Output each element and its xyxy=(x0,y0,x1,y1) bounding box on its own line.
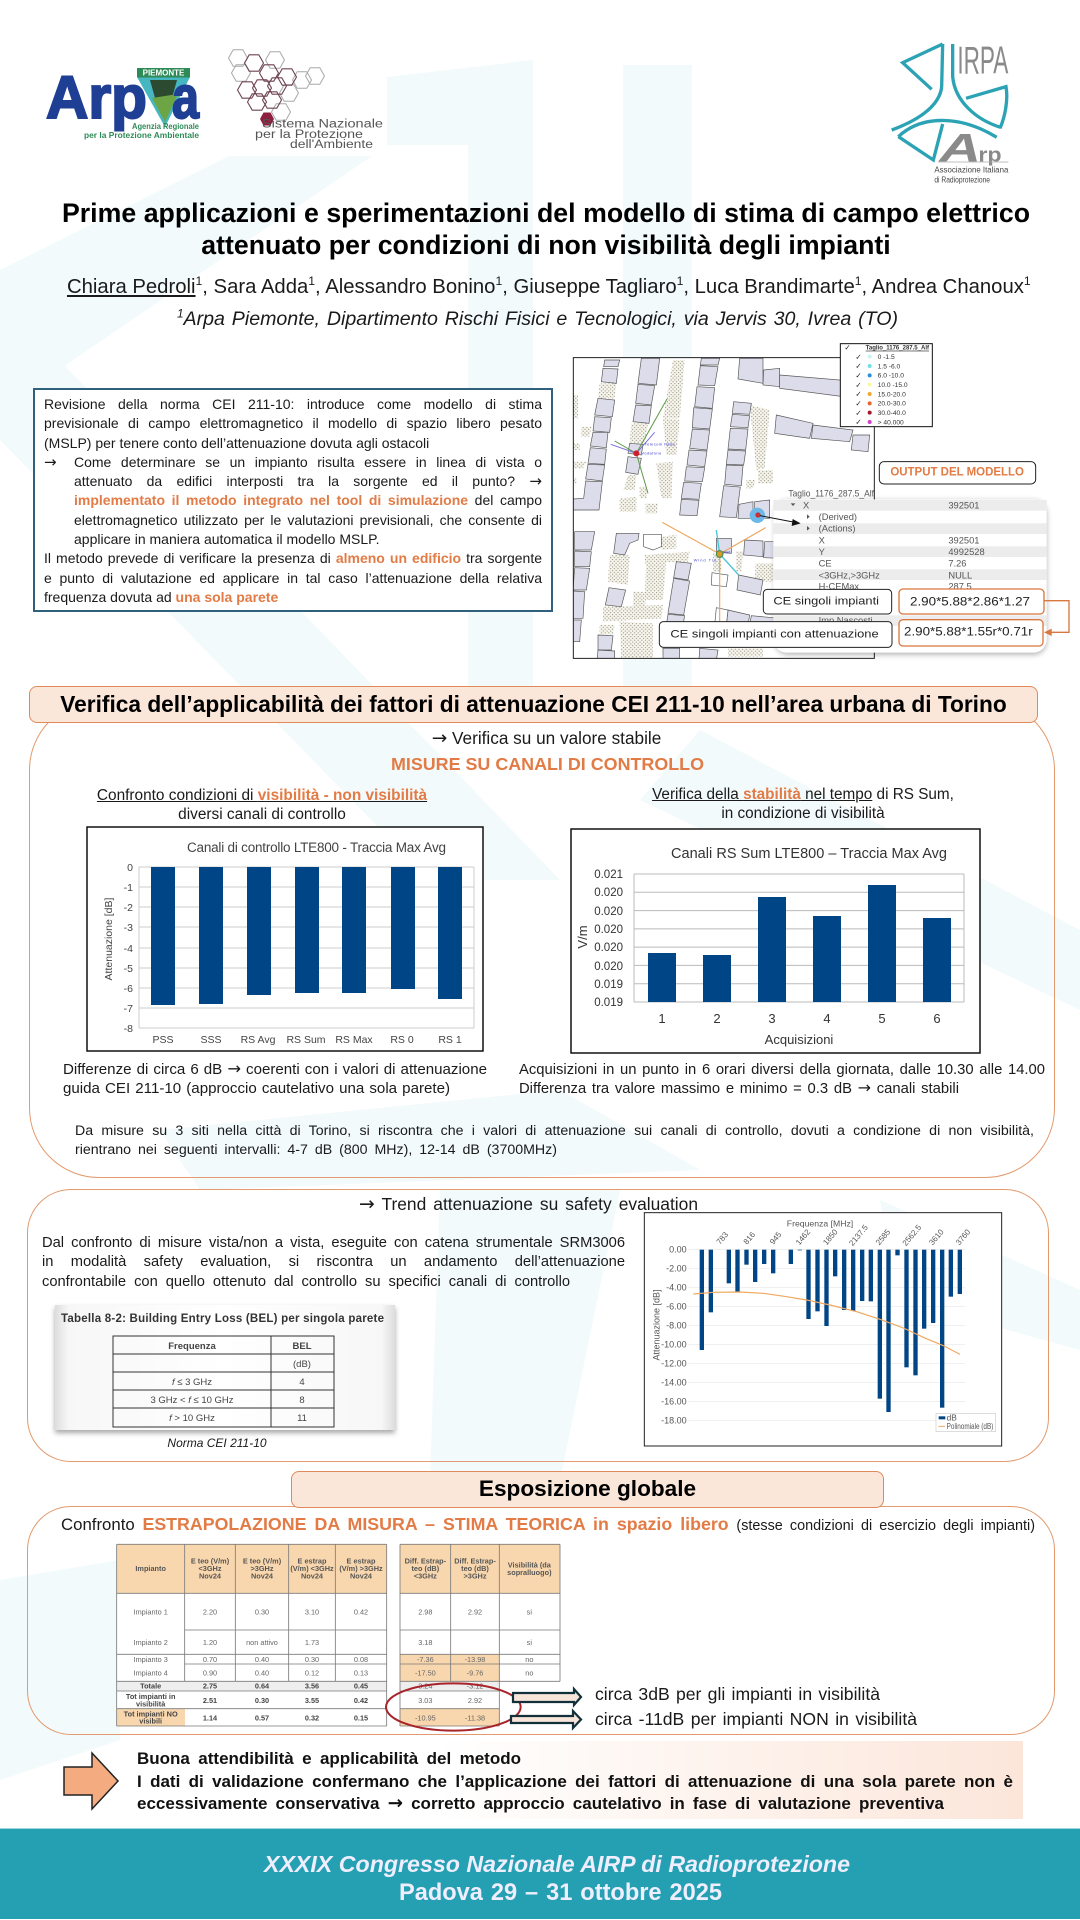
logo: Arpa Piemonte: a xyxy=(172,64,200,131)
table: estrapolazione vs stima: -7.36 xyxy=(417,1655,434,1664)
text: safety evaluation: Dal confronto di misure vista/non a vista, eseguite con catena strumentale SRM3006 xyxy=(42,1235,625,1251)
bar chart: RS Sum: 3 xyxy=(768,1011,776,1026)
table: estrapolazione vs stima: E teo (V/m) xyxy=(243,1556,282,1565)
logo: Arpa Piemonte: Agenzia Regionale xyxy=(132,121,199,131)
table: estrapolazione vs stima: Diff. Estrap- xyxy=(454,1556,496,1565)
table: estrapolazione vs stima: 0.32 xyxy=(305,1713,319,1722)
subheading: trend attenuazione: → Trend attenuazione su safety evaluation xyxy=(359,1194,698,1215)
table: estrapolazione vs stima: -17.50 xyxy=(415,1668,436,1677)
chart legend: Polinomiale (dB) xyxy=(947,1421,993,1431)
bar chart: canali di controllo: -3 xyxy=(124,922,133,934)
table: estrapolazione vs stima: 3.56 xyxy=(305,1682,319,1691)
text: safety evaluation: confrontabile con quello ottenuto dal controllo su specifici canali di controllo xyxy=(42,1274,570,1290)
panel: introduction text: previsionale di campo elettromagnetico il modello di spazio libero pesato xyxy=(44,415,542,431)
label: CE con attenuazione xyxy=(659,622,892,647)
bar chart: canali di controllo: -5 xyxy=(124,963,133,975)
arrow: non visibilita xyxy=(510,1708,582,1731)
table: estrapolazione vs stima: (V/m) <3GHz xyxy=(290,1564,334,1573)
text: safety evaluation xyxy=(42,1235,625,1290)
attribute panel: H-CEMax xyxy=(819,582,859,592)
map legend: ✓ xyxy=(844,343,850,352)
logo: IRPA / AIRP xyxy=(891,38,1009,184)
table: estrapolazione vs stima: Tot impianti NO xyxy=(124,1709,178,1718)
table: estrapolazione vs stima: 2.92 xyxy=(468,1607,482,1616)
table: estrapolazione vs stima: Nov24 xyxy=(350,1572,373,1581)
text: acquisizioni: Differenza tra valore massimo e minimo = 0.3 dB → canali stabili xyxy=(519,1078,959,1097)
table: estrapolazione vs stima: E teo (V/m) xyxy=(191,1556,230,1565)
bar chart: RS Sum: 1 xyxy=(658,1011,666,1026)
table: estrapolazione vs stima: teo (dB) xyxy=(411,1564,440,1573)
map legend: ✓ xyxy=(855,408,861,417)
table: building entry loss: 4 xyxy=(299,1377,305,1388)
text: verifica stabilita: in condizione di visibilità xyxy=(721,805,885,822)
logo: Arpa Piemonte: per la Protezione Ambientale xyxy=(84,130,199,140)
table: estrapolazione vs stima: 0.12 xyxy=(305,1668,319,1677)
bar chart: canali di controllo: SSS xyxy=(200,1034,222,1046)
table: estrapolazione vs stima: 0.13 xyxy=(354,1668,368,1677)
table: estrapolazione vs stima: 0.30 xyxy=(255,1607,269,1616)
bar chart: RS Sum: 0.020 xyxy=(594,961,623,973)
bar chart: attenuazione per frequenza: 945 xyxy=(768,1230,784,1246)
bar chart: attenuazione per frequenza: -10.00 xyxy=(661,1339,687,1349)
text: differenze 6 dB: Differenze di circa 6 dB → coerenti con i valori di attenuazione xyxy=(63,1059,487,1078)
table: estrapolazione vs stima: 2.75 xyxy=(203,1682,217,1691)
panel: conclusioni: I dati di validazione confermano che l’applicazione dei fattori di attenuazione di una sola parete non è xyxy=(137,1772,1013,1790)
panel: introduction text: elettromagnetico utilizzato per le valutazioni previsionali, che consente di xyxy=(74,512,542,528)
table: estrapolazione vs stima: 1.73 xyxy=(305,1638,319,1647)
bar chart: canali di controllo xyxy=(86,826,484,1052)
table: estrapolazione vs stima: 3.18 xyxy=(418,1638,432,1647)
table: estrapolazione vs stima: -13.98 xyxy=(465,1655,485,1664)
table: estrapolazione vs stima: visibilità xyxy=(136,1699,166,1708)
panel outline: verifica xyxy=(29,700,1055,1178)
bar chart: RS Sum: Canali RS Sum LTE800 – Traccia Max Avg xyxy=(671,846,947,862)
bar chart: RS Sum: 0.020 xyxy=(594,942,623,954)
table: estrapolazione vs stima: 0.45 xyxy=(354,1682,368,1691)
attribute panel: NULL xyxy=(948,570,972,580)
table: estrapolazione vs stima xyxy=(116,1544,560,1732)
bar chart: attenuazione per frequenza: 3610 xyxy=(927,1227,946,1247)
table: estrapolazione vs stima: 2.51 xyxy=(203,1696,217,1705)
table: estrapolazione vs stima: -10.95 xyxy=(415,1713,436,1722)
text: acquisizioni xyxy=(519,1062,1045,1097)
map legend: 10.0 -15.0 xyxy=(878,382,908,389)
table: estrapolazione vs stima: visibili xyxy=(139,1717,162,1726)
icon: orange arrow xyxy=(63,1751,119,1811)
map with model output: Wind Tre xyxy=(694,558,717,563)
text: risultati xyxy=(595,1684,918,1729)
value: CE singoli impianti xyxy=(899,589,1044,614)
output label xyxy=(879,462,1036,484)
attribute panel: (Derived) xyxy=(819,512,857,522)
logo: IRPA / AIRP: di Radioprotezione xyxy=(934,175,990,184)
bar chart: attenuazione per frequenza: Attenuazione [dB] xyxy=(651,1289,661,1361)
table: estrapolazione vs stima: Diff. Estrap- xyxy=(405,1556,447,1565)
bar chart: attenuazione per frequenza: 816 xyxy=(742,1230,757,1246)
table: estrapolazione vs stima: si xyxy=(527,1607,532,1616)
table: building entry loss: 11 xyxy=(297,1413,307,1424)
table: estrapolazione vs stima: 3.10 xyxy=(305,1607,319,1616)
bar chart: RS Sum: V/m xyxy=(575,925,590,949)
value: CE singoli impianti: 2.90*5.88*2.86*1.27 xyxy=(910,596,1030,609)
map legend: 6.0 -10.0 xyxy=(878,373,904,380)
attribute panel: <3GHz,>3GHz xyxy=(819,570,880,580)
table: estrapolazione vs stima: si xyxy=(527,1638,532,1647)
logo: Sistema Nazionale per la Protezione dell'Ambiente: Sistema Nazionale xyxy=(262,118,383,130)
logo: Sistema Nazionale per la Protezione dell'Ambiente: per la Protezione xyxy=(255,129,363,141)
attribute panel: 7.26 xyxy=(948,559,966,569)
bar chart: attenuazione per frequenza: Frequenza [MHz] xyxy=(787,1219,853,1229)
title xyxy=(62,198,1030,260)
heading: misure su canali di controllo: MISURE SU CANALI DI CONTROLLO xyxy=(391,754,704,774)
bar chart: canali di controllo: RS 0 xyxy=(390,1034,414,1046)
panel: introduction text: frequenza dovuta ad una sola parete xyxy=(44,589,278,605)
bar chart: canali di controllo: Attenuazione [dB] xyxy=(103,897,115,980)
table: estrapolazione vs stima: 0.40 xyxy=(255,1668,269,1677)
attribute panel: 287.5 xyxy=(948,582,972,592)
title: Prime applicazioni e sperimentazioni del modello di stima di campo elettrico xyxy=(62,198,1030,228)
table: estrapolazione vs stima: 3.03 xyxy=(418,1696,432,1705)
map legend: 0 -1.5 xyxy=(878,354,895,361)
bar chart: attenuazione per frequenza: -14.00 xyxy=(661,1377,687,1387)
bar chart: attenuazione per frequenza: 2585 xyxy=(874,1227,893,1247)
bar chart: attenuazione per frequenza: 2562.5 xyxy=(901,1223,924,1248)
text: risultati: circa 3dB per gli impianti in visibilità xyxy=(595,1684,880,1704)
table: building entry loss: 8 xyxy=(299,1395,305,1406)
table: building entry loss xyxy=(55,1305,395,1430)
map legend: ✓ xyxy=(855,362,861,371)
table: estrapolazione vs stima: <3GHz xyxy=(414,1572,437,1581)
bar chart: RS Sum: 0.019 xyxy=(594,997,623,1009)
bar chart: RS Sum: 0.020 xyxy=(594,906,623,918)
arrow: orange connector xyxy=(1044,601,1069,636)
panel: introduction text: (MSLP) per tenere conto dell’attenuazione dovuta agli ostacoli xyxy=(44,435,429,451)
bar chart: attenuazione per frequenza: -8.00 xyxy=(666,1320,687,1330)
table: estrapolazione vs stima: 0.90 xyxy=(203,1668,217,1677)
bar chart: attenuazione per frequenza: 2137.5 xyxy=(847,1223,870,1248)
table: estrapolazione vs stima: teo (dB) xyxy=(461,1564,489,1573)
attribute panel: Y xyxy=(819,547,826,557)
table: estrapolazione vs stima: sopralluogo) xyxy=(507,1568,552,1577)
map legend: Taglio_1176_287.5_Alf xyxy=(866,345,930,352)
table: estrapolazione vs stima: Nov24 xyxy=(251,1572,274,1581)
logo: IRPA / AIRP: Associazione Italiana xyxy=(934,166,1009,175)
panel outline: esposizione globale xyxy=(27,1506,1055,1735)
table: estrapolazione vs stima: non attivo xyxy=(246,1638,278,1647)
bar chart: RS Sum: Acquisizioni xyxy=(765,1032,833,1047)
table: building entry loss: Frequenza xyxy=(168,1341,216,1352)
table: estrapolazione vs stima: 1.20 xyxy=(203,1638,217,1647)
attribute panel xyxy=(773,489,1047,655)
panel: introduction text xyxy=(33,388,553,612)
panel: introduction text: Il metodo prevede di verificare la presenza di almeno un edificio tra sorgente xyxy=(44,550,542,566)
map legend: ✓ xyxy=(855,399,861,408)
chart legend: dB xyxy=(947,1412,957,1422)
logo: Arpa Piemonte: PIEMONTE xyxy=(143,68,185,78)
table: estrapolazione vs stima: 0.42 xyxy=(354,1607,368,1616)
bar chart: attenuazione per frequenza xyxy=(644,1212,1002,1446)
heading: verifica: Verifica dell’applicabilità dei fattori di attenuazione CEI 211-10 nell’area urbana di Torino xyxy=(60,691,1007,717)
bar chart: canali di controllo: Canali di controllo LTE800 - Traccia Max Avg xyxy=(187,840,446,855)
table: building entry loss: 3 GHz < f ≤ 10 GHz xyxy=(150,1395,234,1406)
table: estrapolazione vs stima: 0.08 xyxy=(354,1655,368,1664)
panel: conclusioni: Buona attendibilità e applicabilità del metodo xyxy=(137,1749,521,1768)
map legend: ✓ xyxy=(855,418,861,427)
bar chart: RS Sum: 0.020 xyxy=(594,887,623,899)
footer xyxy=(0,1828,1080,1919)
bar chart: attenuazione per frequenza: 1850 xyxy=(821,1227,840,1247)
table: estrapolazione vs stima: -9.76 xyxy=(467,1668,483,1677)
table: estrapolazione vs stima: Visibilità (da xyxy=(508,1560,552,1569)
logo: Sistema Nazionale per la Protezione dell'Ambiente: dell'Ambiente xyxy=(290,139,373,151)
chart legend xyxy=(936,1412,996,1432)
map legend: 30.0-40.0 xyxy=(878,410,906,417)
title: attenuato per condizioni di non visibilità degli impianti xyxy=(201,230,891,260)
logo: Sistema Nazionale per la Protezione dell'Ambiente xyxy=(228,49,387,156)
logo: Arpa Piemonte: Arp xyxy=(46,64,147,131)
attribute panel: X xyxy=(819,535,826,545)
text: confronto visibilita: Confronto condizioni di visibilità - non visibilità xyxy=(97,787,427,804)
map legend: 1.5 -6.0 xyxy=(878,363,901,370)
table: building entry loss: f ≤ 3 GHz xyxy=(172,1377,212,1388)
output label: OUTPUT DEL MODELLO xyxy=(890,466,1024,479)
panel: introduction text: applicare in maniera automatica il modello MSLP. xyxy=(74,531,380,547)
map legend: ✓ xyxy=(855,380,861,389)
logo: Arpa Piemonte xyxy=(46,64,200,140)
text: safety evaluation: in modalità safety evaluation, si riscontra un andamento dell’attenuazione xyxy=(42,1254,625,1270)
heading: verifica xyxy=(29,686,1038,723)
authors: Chiara Pedroli1, Sara Adda1, Alessandro Bonino1, Giuseppe Tagliaro1, Luca Brandimarte1, Andrea Chanoux1 xyxy=(67,274,1031,298)
bar chart: canali di controllo: -8 xyxy=(124,1023,133,1035)
footer: XXXIX Congresso Nazionale AIRP di Radioprotezione xyxy=(264,1851,850,1877)
table: estrapolazione vs stima: 0.64 xyxy=(255,1682,270,1691)
table: estrapolazione vs stima: no xyxy=(525,1655,533,1664)
text: confronto visibilita xyxy=(96,787,428,823)
footer: Padova 29 – 31 ottobre 2025 xyxy=(399,1880,722,1906)
text: confronto visibilita: diversi canali di controllo xyxy=(178,806,346,823)
panel: conclusioni: eccessivamente conservativa → corretto approccio cautelativo in fase di valutazione preventiva xyxy=(137,1793,944,1814)
attribute panel: X xyxy=(803,500,810,510)
bar chart: attenuazione per frequenza: 0.00 xyxy=(669,1245,687,1255)
logo: IRPA / AIRP: IRPA xyxy=(957,38,1009,82)
bar chart: RS Sum: 0.020 xyxy=(594,924,623,936)
label: CE singoli impianti: CE singoli impianti xyxy=(773,596,879,608)
bar chart: attenuazione per frequenza: 783 xyxy=(715,1230,730,1246)
attribute panel: CE xyxy=(819,559,832,569)
caption: norma CEI: Norma CEI 211-10 xyxy=(167,1436,267,1450)
attribute panel: 392501 xyxy=(948,535,979,545)
map legend: ✓ xyxy=(855,390,861,399)
table: estrapolazione vs stima: Nov24 xyxy=(301,1572,324,1581)
table: estrapolazione vs stima: E estrap xyxy=(298,1556,327,1565)
table: estrapolazione vs stima: Impianto 4 xyxy=(134,1668,168,1677)
table: estrapolazione vs stima: 0.15 xyxy=(354,1713,368,1722)
text: differenze 6 dB: guida CEI 211-10 (approccio cautelativo una sola parete) xyxy=(63,1080,450,1097)
panel: introduction text: Come determinare se un impianto risulta essere in linea di vista o xyxy=(74,454,542,470)
text: verifica stabilita xyxy=(652,786,954,822)
bar chart: attenuazione per frequenza: -12.00 xyxy=(661,1358,687,1368)
table: building entry loss: Tabella 8-2: Building Entry Loss (BEL) per singola parete xyxy=(61,1313,384,1325)
bar chart: canali di controllo: RS Avg xyxy=(241,1034,276,1046)
table: estrapolazione vs stima: 2.98 xyxy=(418,1607,432,1616)
table: estrapolazione vs stima: >3GHz xyxy=(250,1564,274,1573)
table: estrapolazione vs stima: <3GHz xyxy=(198,1564,222,1573)
table: estrapolazione vs stima: Totale xyxy=(140,1682,161,1691)
bar chart: RS Sum: 0.019 xyxy=(594,979,623,991)
table: estrapolazione vs stima: Nov24 xyxy=(199,1572,222,1581)
bar chart: canali di controllo: -1 xyxy=(124,882,133,894)
table: estrapolazione vs stima: 2.92 xyxy=(468,1696,482,1705)
heading: esposizione globale: Esposizione globale xyxy=(479,1476,696,1501)
table: building entry loss: f > 10 GHz xyxy=(169,1413,215,1424)
table: estrapolazione vs stima: (V/m) >3GHz xyxy=(339,1564,383,1573)
table: estrapolazione vs stima: -11.38 xyxy=(465,1713,485,1722)
text: misure su 3 siti xyxy=(75,1123,1034,1158)
attribute panel: (Actions) xyxy=(819,524,855,534)
map with model output xyxy=(572,343,1070,659)
bar chart: canali di controllo: -2 xyxy=(124,902,133,914)
table: estrapolazione vs stima: no xyxy=(525,1668,533,1677)
table: estrapolazione vs stima: 0.40 xyxy=(255,1655,269,1664)
map legend: ✓ xyxy=(855,352,861,361)
attribute panel: Taglio_1176_287.5_Alf xyxy=(788,489,874,499)
attribute panel: 4992528 xyxy=(948,547,985,557)
table: estrapolazione vs stima: Impianto 3 xyxy=(134,1655,168,1664)
table: estrapolazione vs stima: 3.24 xyxy=(418,1682,432,1691)
panel outline: safety evaluation xyxy=(27,1189,1049,1462)
bar chart: canali di controllo: -4 xyxy=(124,943,133,955)
bar chart: canali di controllo: -6 xyxy=(124,983,133,995)
table: estrapolazione vs stima: 0.30 xyxy=(255,1696,269,1705)
affiliation: 1Arpa Piemonte, Dipartimento Rischi Fisici e Tecnologici, via Jervis 30, Ivrea (TO) xyxy=(177,307,898,330)
map with model output: Telecom Italia xyxy=(645,442,675,447)
panel: introduction text: e punto di valutazione ed applicare in tal caso l’attenuazione della relativa xyxy=(44,570,542,586)
subheading: valore stabile: → Verifica su un valore stabile xyxy=(432,728,661,749)
attribute panel: 392501 xyxy=(948,500,979,510)
bar chart: RS Sum: 0.021 xyxy=(594,869,623,881)
bar chart: attenuazione per frequenza: -6.00 xyxy=(666,1301,687,1311)
arrow: visibilita xyxy=(512,1686,582,1708)
table: estrapolazione vs stima: 2.20 xyxy=(203,1607,217,1616)
map legend: ✓ xyxy=(855,371,861,380)
text: verifica stabilita: Verifica della stabilità nel tempo di RS Sum, xyxy=(652,786,954,803)
table: estrapolazione vs stima: Impianto xyxy=(135,1564,166,1573)
table: estrapolazione vs stima: 0.30 xyxy=(305,1655,319,1664)
panel: introduction text: implementato il metodo integrato nel tool di simulazione del campo xyxy=(74,492,542,508)
bar chart: RS Sum xyxy=(570,828,981,1054)
text: misure su 3 siti: Da misure su 3 siti nella città di Torino, si riscontra che i valori di attenuazione sui canali di controllo, dovuti a condizione di non visibilità, xyxy=(75,1123,1034,1139)
value: CE con attenuazione: 2.90*5.88*1.55r*0.71r xyxy=(904,626,1033,639)
heading: esposizione globale xyxy=(291,1471,884,1508)
map legend xyxy=(840,343,932,427)
bar chart: RS Sum: 4 xyxy=(823,1011,831,1026)
map with model output: Vodafone xyxy=(641,450,662,455)
map with model output: Iliad xyxy=(723,549,730,554)
label: CE singoli impianti xyxy=(763,589,892,614)
panel: conclusioni xyxy=(122,1741,1023,1819)
text: differenze 6 dB xyxy=(63,1059,487,1097)
bar chart: attenuazione per frequenza: -2.00 xyxy=(666,1264,687,1274)
table: estrapolazione vs stima: 0.57 xyxy=(255,1713,269,1722)
attribute panel: Imp Nascosti xyxy=(819,616,873,626)
table: building entry loss: BEL xyxy=(292,1341,312,1352)
arrow: point to attributes xyxy=(760,516,801,526)
table: estrapolazione vs stima: -3.12 xyxy=(467,1682,483,1691)
table: building entry loss: (dB) xyxy=(293,1359,311,1370)
bar chart: RS Sum: 6 xyxy=(933,1011,941,1026)
map legend: 15.0-20.0 xyxy=(878,391,906,398)
table: estrapolazione vs stima: 0.70 xyxy=(203,1655,217,1664)
text: confronto estrapolazione: Confronto ESTRAPOLAZIONE DA MISURA – STIMA TEORICA in spazio libero (stesse condizioni di esercizio degli impianti) xyxy=(61,1514,1035,1534)
logo: IRPA / AIRP: A xyxy=(938,126,981,170)
table: estrapolazione vs stima: 1.14 xyxy=(203,1713,218,1722)
bar chart: attenuazione per frequenza: 3760 xyxy=(954,1227,973,1247)
bar chart: attenuazione per frequenza: -16.00 xyxy=(661,1396,687,1406)
map legend: 20.0-30.0 xyxy=(878,401,906,408)
bar chart: canali di controllo: RS Sum xyxy=(286,1034,326,1046)
bar chart: attenuazione per frequenza: -18.00 xyxy=(661,1415,687,1425)
text: risultati: circa -11dB per impianti NON in visibilità xyxy=(595,1709,917,1729)
bar chart: attenuazione per frequenza: 1462 xyxy=(794,1227,813,1247)
bar chart: canali di controllo: RS 1 xyxy=(438,1034,462,1046)
panel: introduction text: → xyxy=(44,453,57,471)
panel: introduction text: Revisione della norma CEI 211-10: introduce come modello di stima xyxy=(44,396,542,412)
table: estrapolazione vs stima: E estrap xyxy=(347,1556,376,1565)
table: estrapolazione vs stima: Impianto 1 xyxy=(134,1607,168,1616)
table: estrapolazione vs stima: >3GHz xyxy=(463,1572,487,1581)
text: acquisizioni: Acquisizioni in un punto in 6 orari diversi della giornata, dalle 10.30 alle 14.00 xyxy=(519,1062,1045,1078)
bar chart: canali di controllo: RS Max xyxy=(335,1034,373,1046)
table: estrapolazione vs stima: 0.42 xyxy=(354,1696,368,1705)
bar chart: canali di controllo: -7 xyxy=(124,1003,133,1015)
map legend: > 40.000 xyxy=(878,419,904,426)
table: estrapolazione vs stima: Tot impianti in xyxy=(126,1692,176,1701)
logo: IRPA / AIRP: rp xyxy=(978,143,1002,166)
table: estrapolazione vs stima: Impianto 2 xyxy=(134,1638,168,1647)
bar chart: attenuazione per frequenza: -4.00 xyxy=(666,1283,687,1293)
callout: red ellipse xyxy=(386,1683,521,1731)
bar chart: RS Sum: 5 xyxy=(878,1011,886,1026)
value: CE con attenuazione xyxy=(899,620,1043,646)
bar chart: canali di controllo: PSS xyxy=(152,1034,174,1046)
bar chart: RS Sum: 2 xyxy=(713,1011,721,1026)
label: CE con attenuazione: CE singoli impianti con attenuazione xyxy=(670,629,879,641)
table: estrapolazione vs stima: 3.55 xyxy=(305,1696,319,1705)
text: misure su 3 siti: rientrano nei seguenti intervalli: 4-7 dB (800 MHz), 12-14 dB (3700MHz) xyxy=(75,1142,557,1158)
panel: introduction text: attenuato da edifici interposti tra la sorgente ed il punto? → xyxy=(74,472,542,490)
bar chart: canali di controllo: 0 xyxy=(127,862,133,874)
